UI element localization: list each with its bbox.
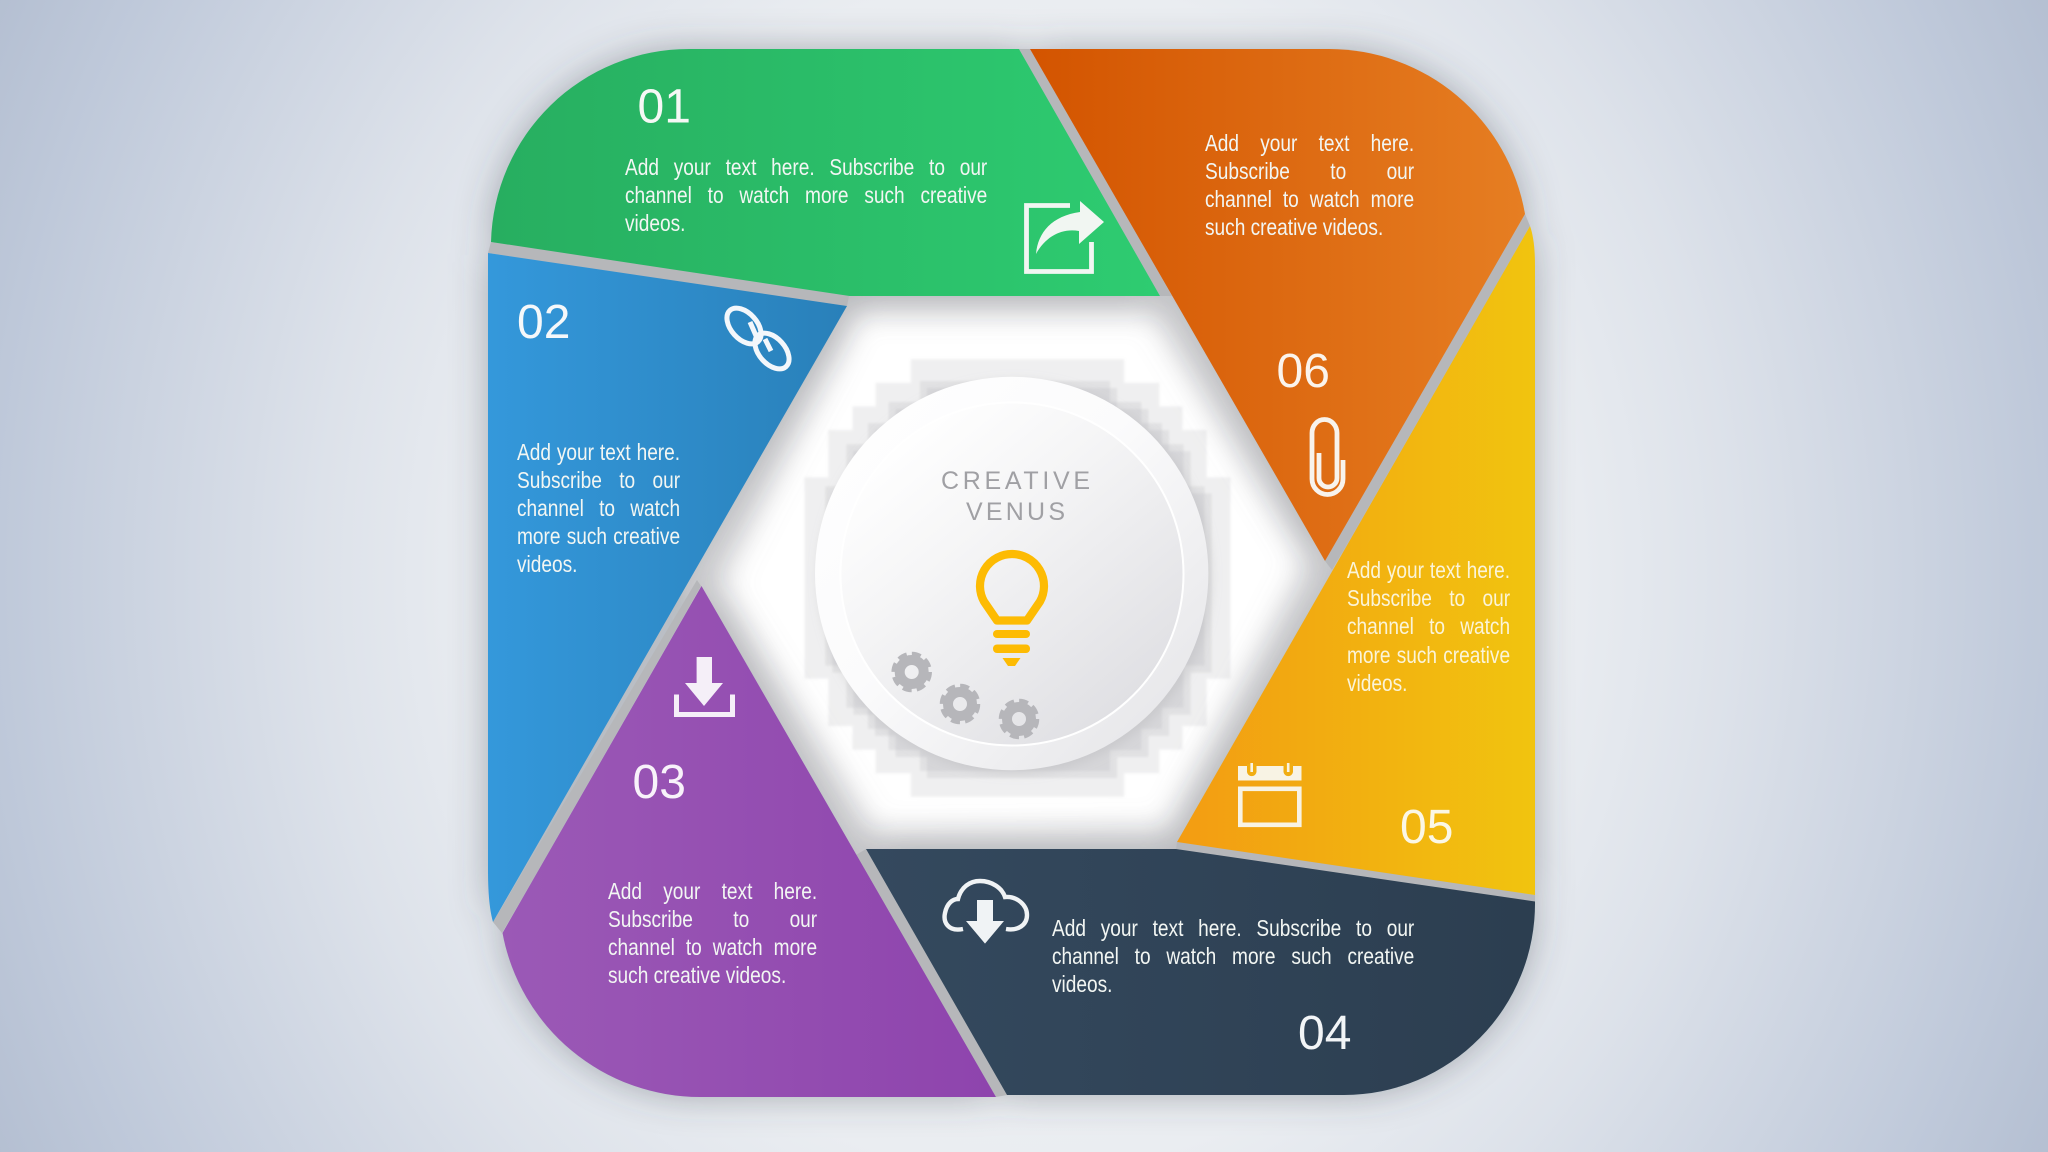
icon: light bulb <box>980 554 1044 666</box>
text 05: videos. <box>1347 670 1407 696</box>
text 01 <box>625 152 1065 242</box>
icon: chain link <box>720 302 796 375</box>
number 05: 05 <box>1400 801 1453 854</box>
number 06: 06 <box>1276 345 1330 398</box>
soft shadow cast by the panels <box>488 49 1535 1097</box>
grey shading along the inner edges of the hexagon <box>702 296 1325 849</box>
text 05 <box>1347 556 1547 706</box>
text 01: videos. <box>625 210 685 236</box>
text 06: Add your text here. <box>1205 130 1414 156</box>
brand name <box>941 467 1090 526</box>
text 04 <box>1052 914 1492 1004</box>
icon: calendar <box>1238 763 1302 825</box>
panel 01: green <box>491 49 1160 296</box>
text 02: channel to watch <box>517 495 680 521</box>
icon: paperclip <box>1312 420 1343 494</box>
text 02: Subscribe to our <box>517 467 680 493</box>
icon: gears <box>894 654 1037 737</box>
text 05: Add your text here. <box>1347 557 1510 583</box>
text 03: such creative videos. <box>608 962 786 988</box>
text 05: channel to watch <box>1347 613 1510 639</box>
brand name: VENUS <box>966 498 1065 526</box>
white central hexagon backdrop <box>680 285 1345 865</box>
text 01: channel to watch more such creative <box>625 182 987 208</box>
text 06: channel to watch more <box>1205 186 1414 212</box>
text 04: videos. <box>1052 971 1112 997</box>
text 03: Subscribe to our <box>608 906 817 932</box>
text 02: more such creative <box>517 523 680 549</box>
central disc with brand and icons <box>815 377 1212 774</box>
text 05: Subscribe to our <box>1347 585 1510 611</box>
text 04: Add your text here. Subscribe to our <box>1052 914 1414 940</box>
pixelated halo behind the central disc <box>805 359 1230 797</box>
text 05: more such creative <box>1347 642 1510 668</box>
icon: download <box>674 657 735 717</box>
text 03 <box>608 876 864 996</box>
brand name: CREATIVE <box>941 467 1090 495</box>
number 02: 02 <box>517 296 570 349</box>
text 03: Add your text here. <box>608 878 817 904</box>
text 06 <box>1205 128 1461 248</box>
number 01: 01 <box>638 80 691 134</box>
number 04: 04 <box>1298 1007 1351 1060</box>
icon: cloud download <box>945 881 1027 944</box>
text 03: channel to watch more <box>608 934 817 960</box>
panel 05: yellow <box>1177 226 1547 895</box>
text 02: videos. <box>517 551 577 577</box>
text 01: Add your text here. Subscribe to our <box>625 154 987 180</box>
panel 02: blue <box>488 253 847 922</box>
panel 04: navy <box>866 849 1535 1095</box>
text 02 <box>517 438 717 588</box>
grey gaps between the panels <box>488 49 1535 1097</box>
text 06: such creative videos. <box>1205 214 1383 240</box>
panel 03: purple <box>502 586 996 1097</box>
text 02: Add your text here. <box>517 438 680 464</box>
number 03: 03 <box>632 756 686 809</box>
text 04: channel to watch more such creative <box>1052 943 1414 969</box>
panel 06: orange <box>1030 49 1525 561</box>
icon: share <box>1026 201 1104 272</box>
text 06: Subscribe to our <box>1205 158 1414 184</box>
